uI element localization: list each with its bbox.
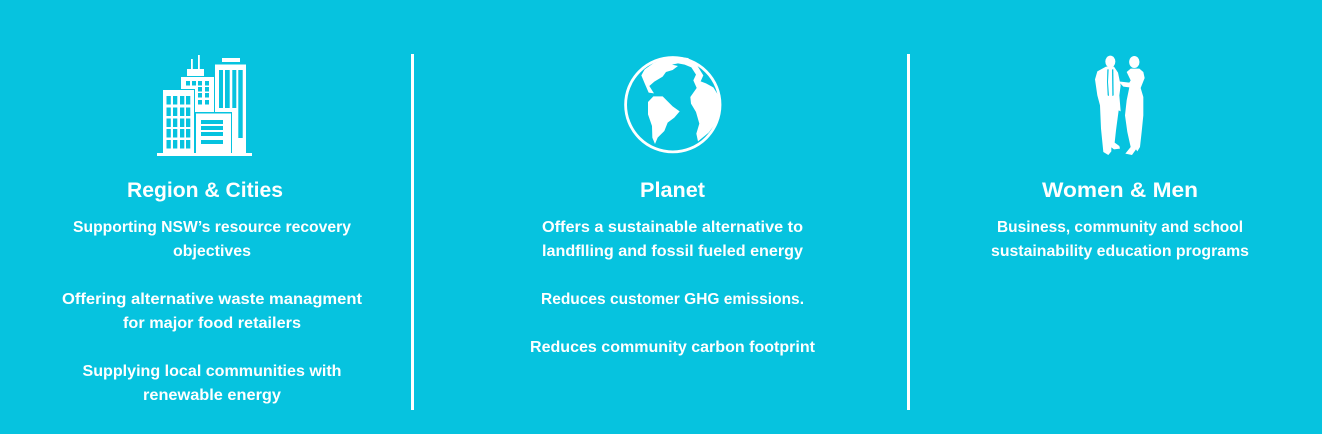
text block: education programs: Business, community and school — [997, 219, 1243, 236]
divider: left — [411, 54, 414, 410]
text block: carbon footprint: Reduces community carbon footprint — [530, 339, 816, 356]
text block: renewable energy: Supplying local communities with — [82, 363, 342, 380]
text block: resource recovery: objectives — [173, 243, 251, 260]
text block: education programs — [991, 219, 1249, 260]
icon: woman silhouette — [1118, 56, 1145, 155]
panel: region and cities — [62, 55, 363, 404]
text block: GHG emissions: Reduces customer GHG emissions. — [541, 291, 804, 308]
text block: waste management: for major food retailers — [123, 315, 301, 332]
text block: renewable energy — [82, 363, 342, 404]
icon: man silhouette — [1095, 56, 1121, 155]
text block: resource recovery — [73, 219, 351, 260]
icon: globe — [626, 57, 720, 152]
text block: education programs: sustainability education programs — [991, 243, 1249, 260]
divider: right — [907, 54, 910, 410]
icon: city buildings — [157, 55, 252, 156]
panel: planet — [530, 57, 816, 356]
text block: renewable energy: renewable energy — [143, 387, 281, 404]
heading: region and cities: Region & Cities — [127, 179, 283, 202]
heading: women and men: Women & Men — [1042, 179, 1198, 202]
text block: sustainable alternative — [542, 219, 803, 260]
heading: planet: Planet — [640, 179, 705, 202]
panel: women and men — [991, 56, 1249, 260]
text block: waste management — [62, 291, 363, 332]
icon: business man and woman — [1095, 56, 1145, 155]
text block: sustainable alternative: landflling and fossil fueled energy — [542, 243, 803, 260]
text block: waste management: Offering alternative waste managment — [62, 291, 363, 308]
text block: resource recovery: Supporting NSW’s resource recovery — [73, 219, 351, 236]
text block: sustainable alternative: Offers a sustainable alternative to — [542, 219, 803, 236]
